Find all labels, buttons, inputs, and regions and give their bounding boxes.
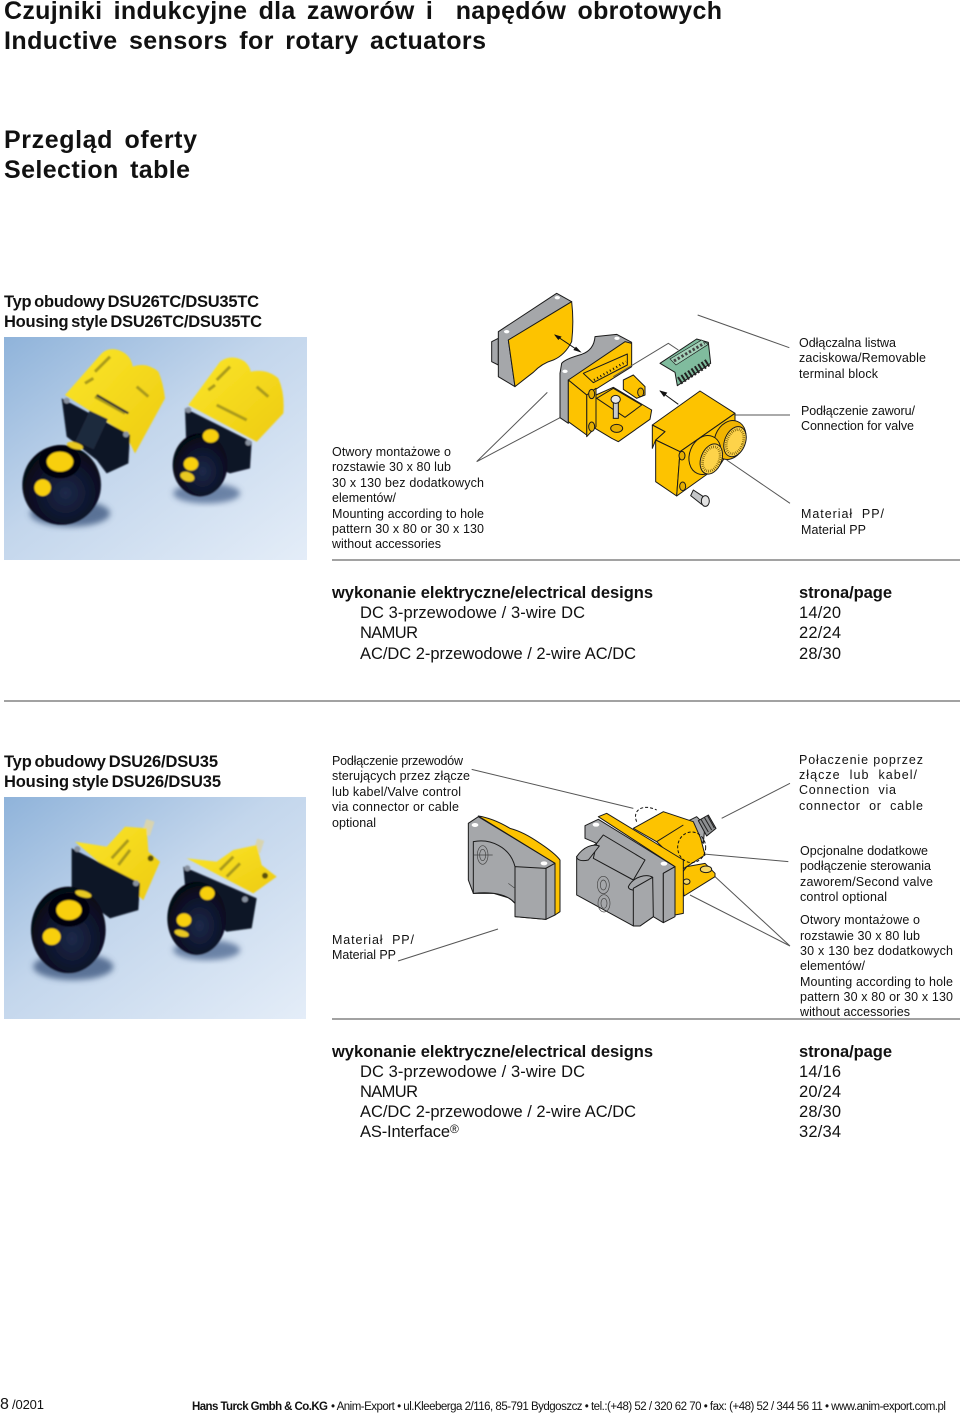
footer: page number xyxy=(0,1396,44,1413)
table: electrical designs 1: strona/page xyxy=(799,584,892,602)
label: connection for valve: Connection for valve xyxy=(801,419,914,433)
part: housing xyxy=(577,812,715,926)
table: electrical designs 2: 14/16 xyxy=(799,1063,841,1081)
footer: page number: 8 xyxy=(0,1396,9,1413)
text: control connection note: via connector or cable xyxy=(332,800,459,814)
table: electrical designs 1: DC 3-przewodowe / 3-wire DC xyxy=(360,604,585,622)
text: control connection note xyxy=(332,754,470,830)
table: electrical designs 2: 28/30 xyxy=(799,1103,841,1121)
part: central housing xyxy=(560,334,652,442)
part: valve connector block xyxy=(652,391,752,496)
label: mounting note: Otwory montażowe o xyxy=(800,913,920,927)
label: material PP: Material PP xyxy=(332,948,396,962)
footer: contact line: Hans Turck Gmbh & Co.KG xyxy=(192,1401,328,1413)
table: electrical designs 2: AS-Interface xyxy=(360,1123,450,1141)
table: electrical designs 2: wykonanie elektryczne/electrical designs xyxy=(331,1043,653,1061)
label: mounting note: 30 x 130 bez dodatkowych xyxy=(800,944,953,958)
title xyxy=(4,0,722,55)
diagram: exploded view DSU26TC xyxy=(477,293,790,506)
heading: housing style DSU26TC/DSU35TC xyxy=(4,293,262,331)
heading: housing style DSU26/DSU35: Housing style DSU26/DSU35 xyxy=(4,773,221,791)
label: removable terminal block: Odłączalna listwa xyxy=(799,336,896,350)
table: electrical designs 2 xyxy=(331,1043,892,1141)
label: connection for valve: Podłączenie zaworu/ xyxy=(801,404,916,418)
table: electrical designs 1: 14/20 xyxy=(799,604,841,622)
table: electrical designs 2: DC 3-przewodowe / 3-wire DC xyxy=(360,1063,585,1081)
label: material PP xyxy=(801,507,885,537)
part: cover plate xyxy=(492,293,573,387)
label: second valve control optional: Opcjonalne dodatkowe xyxy=(800,844,928,858)
table: electrical designs 1: 28/30 xyxy=(799,645,841,663)
label: connection via connector or cable: Połaczenie poprzez xyxy=(799,753,923,767)
label: material PP: Material PP xyxy=(801,523,866,537)
part: cover xyxy=(468,816,560,919)
table: electrical designs 2: strona/page xyxy=(799,1043,892,1061)
label: material PP xyxy=(332,933,415,962)
text: mounting note: rozstawie 30 x 80 lub xyxy=(332,460,451,474)
label: connection via connector or cable: connector or cable xyxy=(799,799,923,813)
heading: housing style DSU26TC/DSU35TC: Typ obudowy DSU26TC/DSU35TC xyxy=(4,293,259,311)
heading: selection table xyxy=(4,126,197,184)
leader lines xyxy=(477,315,790,503)
heading: housing style DSU26/DSU35 xyxy=(4,753,221,791)
part: green terminal block xyxy=(660,339,711,386)
table: electrical designs 1: AC/DC 2-przewodowe / 2-wire AC/DC xyxy=(360,645,636,663)
table: electrical designs 1: NAMUR xyxy=(360,624,418,642)
label: mounting note: Mounting according to hole xyxy=(800,975,953,989)
table: electrical designs 2: 20/24 xyxy=(799,1083,841,1101)
label: mounting note: without accessories xyxy=(799,1005,910,1019)
leader lines xyxy=(472,769,790,946)
text: mounting note: without accessories xyxy=(331,537,441,551)
label: mounting note: rozstawie 30 x 80 lub xyxy=(800,929,920,943)
label: removable terminal block: zaciskowa/Removable xyxy=(799,351,926,365)
text: mounting note: elementów/ xyxy=(332,491,397,505)
label: connection via connector or cable: złącze lub kabel/ xyxy=(799,768,918,782)
heading: housing style DSU26/DSU35: Typ obudowy DSU26/DSU35 xyxy=(4,753,218,771)
label: mounting note: pattern 30 x 80 or 30 x 130 xyxy=(800,990,953,1004)
title: Inductive sensors for rotary actuators xyxy=(4,27,486,55)
arrows xyxy=(554,334,678,404)
text: control connection note: sterujących przez złącze xyxy=(332,769,470,783)
dashed optional connector outlines xyxy=(635,807,706,863)
photo: DSU26/DSU35 sensors xyxy=(4,797,306,1019)
heading: selection table: Przegląd oferty xyxy=(4,126,197,154)
text: control connection note: lub kabel/Valve control xyxy=(332,785,461,799)
diagram: exploded view DSU26 xyxy=(468,769,790,946)
table: electrical designs 1: 22/24 xyxy=(799,624,841,642)
label: material PP: Materiał PP/ xyxy=(332,933,415,947)
table: electrical designs 2: ® xyxy=(450,1122,459,1136)
text: mounting note: Otwory montażowe o xyxy=(332,445,451,459)
label: mounting note xyxy=(799,913,953,1019)
heading: selection table: Selection table xyxy=(4,156,190,184)
leader line: material PP xyxy=(398,929,498,961)
label: removable terminal block xyxy=(799,336,926,381)
text: mounting note: pattern 30 x 80 or 30 x 130 xyxy=(332,522,484,536)
table: electrical designs 1: wykonanie elektryczne/electrical designs xyxy=(331,584,653,602)
label: material PP: Materiał PP/ xyxy=(801,507,885,521)
label: mounting note: elementów/ xyxy=(800,959,866,973)
text: control connection note: Podłączenie przewodów xyxy=(332,754,464,768)
label: second valve control optional: podłączenie sterowania xyxy=(800,859,931,873)
footer: page number: /0201 xyxy=(12,1397,44,1412)
heading: housing style DSU26TC/DSU35TC: Housing style DSU26TC/DSU35TC xyxy=(4,313,262,331)
table: electrical designs 2: 32/34 xyxy=(799,1123,841,1141)
leader line: terminal slot xyxy=(613,343,678,377)
text: control connection note: optional xyxy=(332,816,376,830)
label: removable terminal block: terminal block xyxy=(799,367,879,381)
label: connection via connector or cable xyxy=(799,753,923,813)
label: second valve control optional: control optional xyxy=(800,890,887,904)
photo: DSU26TC/DSU35TC sensors xyxy=(4,337,307,560)
footer: contact line: • Anim-Export • ul.Kleeberga 2/116, 85-791 Bydgoszcz • tel.:(+48) 52 / 320 62 70 • fax: (+48) 52 / 344 56 11 • www.anim-export.com.pl xyxy=(331,1401,946,1413)
part: connector xyxy=(687,815,716,843)
label: second valve control optional xyxy=(800,844,933,904)
table: electrical designs 2: NAMUR xyxy=(360,1083,418,1101)
text: mounting note xyxy=(331,445,484,551)
text: mounting note: Mounting according to hole xyxy=(332,507,484,521)
label: second valve control optional: zaworem/Second valve xyxy=(800,875,933,889)
text: mounting note: 30 x 130 bez dodatkowych xyxy=(332,476,484,490)
label: connection via connector or cable: Connection via xyxy=(799,783,896,797)
table: electrical designs 1 xyxy=(331,584,892,663)
table: electrical designs 2: AC/DC 2-przewodowe / 2-wire AC/DC xyxy=(360,1103,636,1121)
label: connection for valve xyxy=(801,404,916,433)
part: screw xyxy=(691,490,709,506)
